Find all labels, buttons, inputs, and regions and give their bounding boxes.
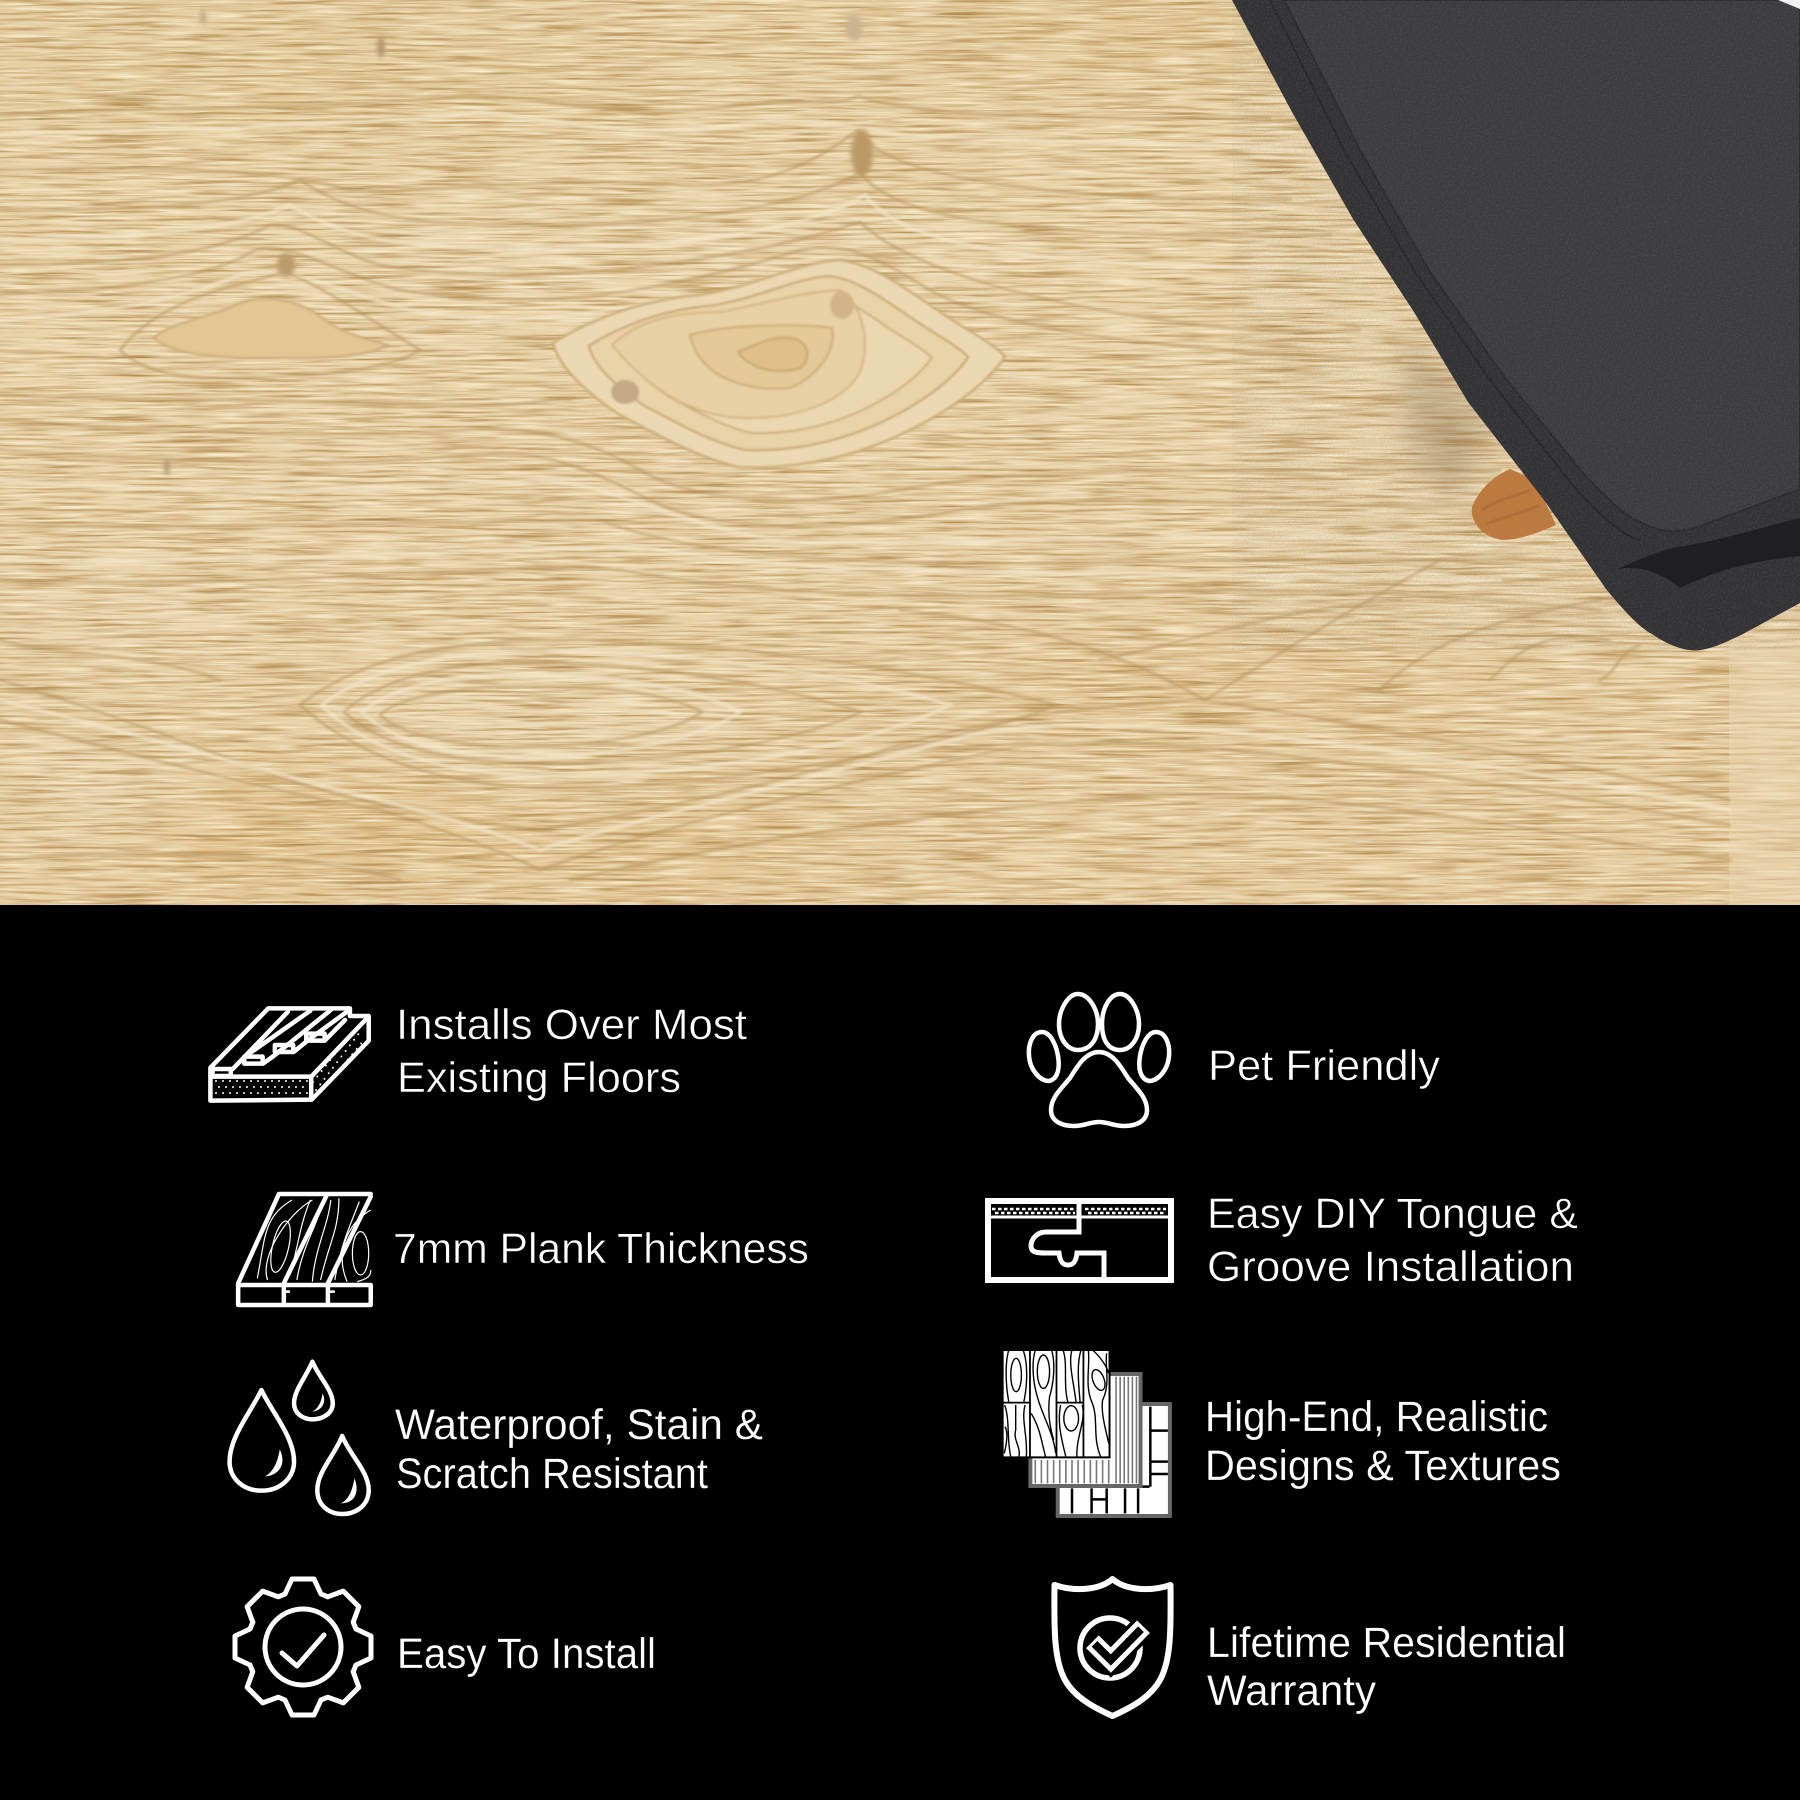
icon: layered floor section <box>210 1008 369 1101</box>
icon detail: stippled core <box>216 1027 364 1093</box>
feature: waterproof, stain and scratch resistant <box>230 1362 763 1514</box>
icon: stacked texture swatches <box>1003 1350 1170 1516</box>
text: installs over most: Installs Over Most <box>396 1002 747 1049</box>
right plank seam <box>1729 640 1800 905</box>
knot: light teardrop <box>120 272 420 378</box>
icon: paw print <box>1029 994 1169 1126</box>
text: 7mm plank thickness: 7mm Plank Thickness <box>393 1226 809 1273</box>
chair: upholstered base <box>1232 0 1800 650</box>
text: easy to install: Easy To Install <box>397 1631 656 1678</box>
text: lifetime residential: Lifetime Residential <box>1207 1620 1566 1667</box>
feature: high-end realistic designs and textures <box>1003 1350 1561 1516</box>
icon: tongue and groove cross section <box>988 1201 1171 1280</box>
feature: installs over most existing floors <box>210 1002 747 1102</box>
feature: 7mm plank thickness <box>238 1194 809 1305</box>
text: waterproof, stain and: Waterproof, Stain & <box>395 1402 763 1449</box>
photo: wood plank floor with chair <box>0 0 1800 905</box>
text: designs and textures: Designs & Textures <box>1205 1443 1561 1490</box>
feature: easy DIY tongue and groove installation <box>988 1191 1578 1291</box>
icon: shield with check mark <box>1054 1579 1171 1716</box>
icon: three water drops <box>230 1362 369 1514</box>
feature: lifetime residential warranty <box>1054 1579 1566 1716</box>
feature: pet friendly <box>1029 994 1441 1126</box>
text: high-end, realistic: High-End, Realistic <box>1205 1394 1548 1441</box>
chair: dark fold under cushion <box>1617 518 1800 588</box>
swatch: back tile pattern <box>1058 1404 1170 1516</box>
chair: fabric texture <box>1232 0 1800 650</box>
swatch: middle stripe pattern <box>1030 1374 1141 1486</box>
text: groove installation: Groove Installation <box>1207 1244 1574 1291</box>
chair: shadow on floor <box>1400 330 1490 500</box>
feature: easy to install <box>235 1579 656 1715</box>
text: easy DIY tongue and: Easy DIY Tongue & <box>1207 1191 1578 1238</box>
wood floor surface <box>0 0 1800 905</box>
text: pet friendly: Pet Friendly <box>1208 1043 1441 1090</box>
text: warranty: Warranty <box>1207 1668 1377 1715</box>
wood grain: upper ripples around small knots <box>0 95 1600 610</box>
text: existing floors: Existing Floors <box>397 1055 681 1102</box>
icon: plank with grain <box>238 1194 371 1305</box>
chair: wooden leg <box>1472 469 1556 540</box>
swatch: front wood grain <box>1003 1350 1110 1457</box>
chair: seat cushion <box>1284 0 1800 531</box>
icon: gear with check mark <box>235 1579 371 1715</box>
text: scratch resistant: Scratch Resistant <box>396 1451 708 1498</box>
knot: small dark marks <box>164 10 873 475</box>
knot: concentric rings <box>553 260 1005 467</box>
wood grain: lower cathedral knot <box>0 560 1730 880</box>
